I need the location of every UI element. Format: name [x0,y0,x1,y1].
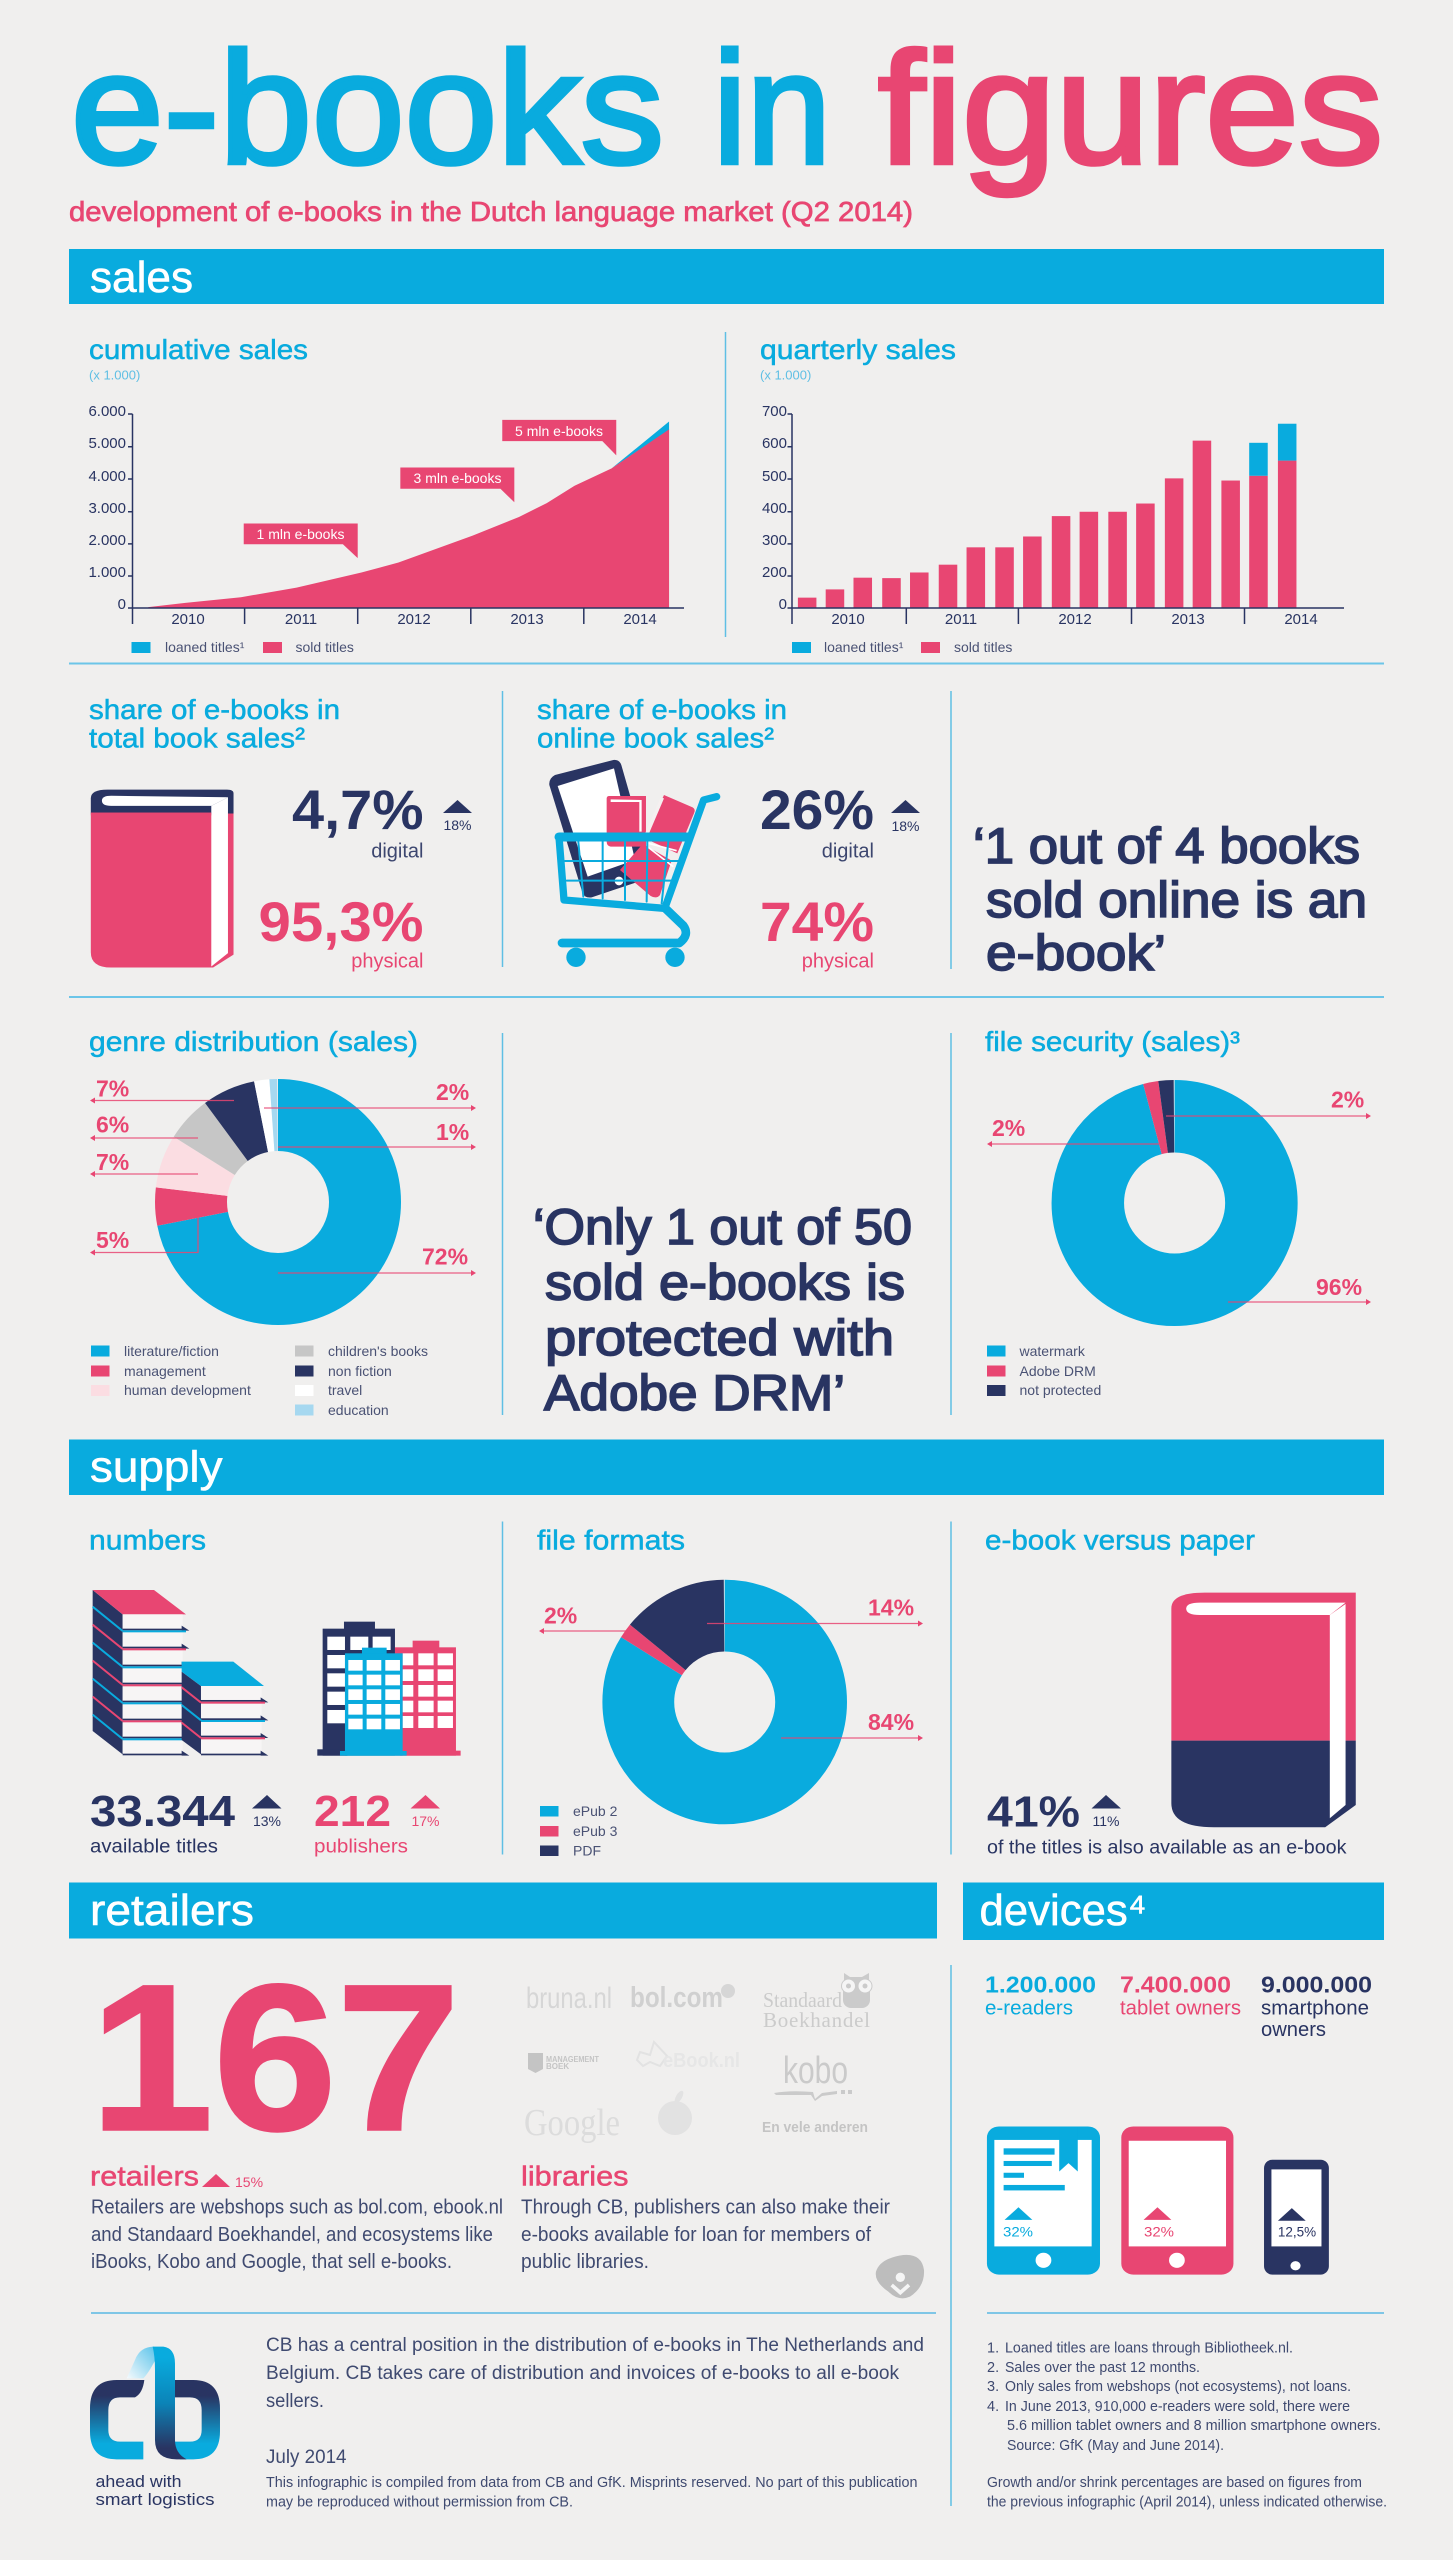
text block: retailers: 15% [235,2174,263,2190]
text block: CB description: July 2014 [266,2447,347,2468]
callout: 3 mln: 3 mln e-books [414,470,501,486]
stat: publishers: 212 [314,1787,391,1836]
logo: kobo [774,2050,852,2101]
icon: smartphone [1264,2160,1329,2275]
icon: smartphone: 12,5% [1278,2224,1316,2240]
quote: 1 out of 4 [973,818,1367,981]
icon: grey CB badge [876,2255,924,2298]
logo: Standaard Boekhandel: Boekhandel [763,2008,870,2032]
footnotes: In June 2013, 910,000 e-readers were sold, there were [1005,2399,1350,2415]
legend: sold titles [954,639,1012,655]
stat: available titles [90,1787,282,1858]
heading: quarterly sales: quarterly sales [760,334,956,365]
stat: 41% [987,1788,1347,1858]
leader labels: 72% [422,1244,468,1270]
logo: Managementboek: BOEK [546,2062,569,2071]
heading: file formats [537,1524,685,1556]
bar chart: 2011 [945,611,977,628]
area chart: 2010 [171,611,205,628]
text block: CB description: sellers. [266,2391,324,2412]
legend [540,1803,618,1858]
callout: 1 mln [244,523,358,558]
legend: education [328,1402,389,1418]
bar chart [762,403,1344,628]
leader labels: 2% [992,1115,1025,1141]
legend: sold titles [296,639,354,655]
legend: Adobe DRM [1020,1363,1096,1379]
bar chart: 600 [762,435,787,452]
logo: kobo: kobo [783,2050,848,2092]
stat: e-readers: e-readers [985,1998,1073,2020]
bar chart: 400 [762,500,787,517]
stat: digital: digital [822,840,874,862]
legend [132,639,354,655]
logo: Managementboek [528,2053,599,2073]
area chart: 2011 [285,611,317,628]
legend [987,1343,1101,1398]
stat: available titles: 33.344 [90,1787,236,1836]
quote: 1 out of 50: Adobe DRM’ [544,1365,845,1421]
growth arrow: 18% [891,818,920,834]
unit note: (x 1.000) [89,368,140,382]
icon: book [91,790,234,968]
icon: buildings [317,1622,461,1756]
logo: Managementboek: MANAGEMENT [546,2055,599,2064]
callout: 5 mln: 5 mln e-books [515,423,603,439]
panel: genre distribution [89,1026,476,1418]
donut chart [191,1115,365,1289]
area chart: 2013 [510,611,544,628]
bar chart: 700 [762,403,787,420]
stat: e-readers: 1.200.000 [985,1972,1096,1998]
section bar: retailers: retailers [90,1886,254,1935]
text block: CB description: Belgium. CB takes care of distribution and invoices of e-books to all e-book [266,2363,899,2384]
leader labels: 1% [436,1119,469,1145]
leader labels: 84% [868,1709,914,1735]
footnotes: Loaned titles are loans through Bibliotheek.nl. [1005,2340,1293,2356]
big number: 167 retailers: 167 [90,1942,460,2174]
panel: cumulative sales [88,334,684,655]
leader labels: 14% [868,1594,914,1620]
donut chart [1088,1116,1261,1290]
area chart: 5.000 [88,435,126,452]
stat: publishers [314,1787,440,1858]
quote: 1 out of 50: protected with [545,1310,894,1366]
icon: shopping cart [549,760,717,967]
stat: 41%: 41% [987,1788,1080,1836]
area chart: 2.000 [88,532,126,549]
text block: retailers [90,2160,503,2273]
footnotes: Only sales from webshops (not ecosystems), not loans. [1005,2379,1351,2395]
legend: loaned titles¹ [824,639,904,655]
section bar: supply [69,1440,1384,1495]
leader labels: 2% [1331,1086,1364,1112]
title: figures [878,19,1383,197]
heading [89,694,340,754]
stat: physical: physical [351,950,424,972]
callout: 5 mln [502,420,616,455]
legend: ePub 2 [573,1803,618,1819]
legend: non fiction [328,1363,392,1379]
area chart: 1.000 [88,564,126,581]
heading: cumulative sales: cumulative sales [89,334,308,365]
area chart: 2012 [397,611,431,628]
icon: tablet: 32% [1144,2224,1174,2240]
text block: CB description: CB has a central position in the distribution of e-books in The Netherlands and [266,2335,924,2356]
stat: tablet owners: 7.400.000 [1120,1972,1231,1998]
footnotes: Source: GfK (May and June 2014). [1007,2438,1224,2454]
heading [537,694,787,754]
leader labels: 2% [436,1079,469,1105]
bar chart: 2010 [831,611,865,628]
panel: numbers [89,1524,461,1858]
donut chart [638,1616,811,1788]
logo: Standaard Boekhandel: Standaard [763,1988,842,2012]
stat: tablet owners: tablet owners [1120,1998,1241,2020]
bar chart: 0 [779,596,787,613]
growth arrow [891,800,920,834]
footnotes: 1. [987,2340,999,2356]
tagline [96,2472,214,2509]
stat: digital: digital [371,840,424,862]
title: in [713,19,831,197]
growth arrow: 18% [443,817,472,833]
quote: 1 out of 50: sold e-books is [545,1254,905,1310]
stat: e-readers [985,1972,1096,2020]
stat: publishers: 17% [411,1813,440,1829]
footnotes: the previous infographic (April 2014), unless indicated otherwise. [987,2494,1387,2510]
text block: libraries: libraries [521,2160,628,2192]
legend: management [124,1363,206,1379]
heading: share of e-books in [89,694,340,725]
icon: tablet [1121,2126,1233,2275]
icon: e-reader: 32% [1003,2224,1033,2240]
footnotes: 3. [987,2379,999,2395]
retailer logos [524,1973,872,2144]
bar chart: 200 [762,564,787,581]
text block: libraries: Through CB, publishers can also make their [521,2196,890,2218]
stat: physical: 74% [760,890,874,953]
area chart: 2014 [623,611,657,628]
stat: digital: 26% [760,778,874,841]
legend [91,1343,428,1418]
quote: 1 out of 50 [533,1199,912,1421]
text block: libraries: public libraries. [521,2251,649,2273]
title: e-books [71,19,664,197]
stat: available titles: available titles [90,1836,218,1858]
subtitle: development of e-books in the Dutch language market (Q2 2014) [69,196,913,227]
legend: not protected [1020,1382,1101,1398]
footnotes: 2. [987,2360,999,2376]
logo: and many others: En vele anderen [762,2119,868,2136]
text block: libraries [521,2160,890,2273]
heading: online book sales² [537,722,774,754]
legend: loaned titles¹ [165,639,245,655]
legend: ePub 3 [573,1823,618,1839]
icon: e-reader [987,2126,1100,2275]
icon: big book [1171,1593,1356,1827]
quote: 1 out of 50: ‘Only 1 out of 50 [533,1199,912,1255]
section bar: sales: sales [90,253,193,302]
logo: bol.com: bol.com [630,1982,723,2014]
text block: libraries: e-books available for loan for members of [521,2224,871,2246]
logo: Standaard Boekhandel [763,1973,872,2032]
legend: PDF [573,1842,601,1858]
bar chart: 2012 [1058,611,1092,628]
callout: 3 mln [400,468,514,502]
quote: 1 out of 4: ‘1 out of 4 books [973,818,1360,874]
footnotes: Sales over the past 12 months. [1005,2360,1200,2376]
section bar: sales [69,249,1384,304]
footnotes [987,2340,1387,2510]
tagline: smart logistics [96,2490,214,2509]
area chart: 4.000 [88,468,126,485]
text block: CB description [266,2335,924,2510]
text block: retailers: and Standaard Boekhandel, and ecosystems like [91,2224,493,2246]
text block: CB description: This infographic is compiled from data from CB and GfK. Misprints reserved. No part of this publication [266,2475,918,2491]
text block: CB description: may be reproduced without permission from CB. [266,2494,573,2510]
stat: smartphone owners: 9.000.000 [1261,1972,1372,1998]
area chart [88,403,684,628]
heading: total book sales² [89,722,305,754]
stat: physical: physical [802,950,874,972]
leader labels [987,1086,1371,1305]
panel: share in total book sales [89,694,472,972]
footnotes: 5.6 million tablet owners and 8 million smartphone owners. [1007,2418,1381,2434]
heading: file security (sales)³ [985,1026,1240,1057]
bar chart: 300 [762,532,787,549]
panel: file security [985,1026,1371,1398]
quote: 1 out of 4: e-book’ [986,925,1166,981]
icon: book stacks [93,1590,268,1756]
text block: retailers: Retailers are webshops such as bol.com, ebook.nl [91,2196,503,2218]
title [71,19,1383,197]
logo: Google: Google [524,2102,620,2144]
area chart: 6.000 [88,403,126,420]
panel: file formats [537,1524,923,1858]
stat: 41%: 11% [1093,1813,1119,1829]
logo: bruna: bruna.nl [526,1982,612,2015]
heading: numbers [89,1524,206,1556]
unit note: (x 1.000) [760,368,811,382]
leader labels: 5% [96,1227,129,1253]
text block: retailers: iBooks, Kobo and Google, that sell e-books. [91,2251,452,2273]
logo: Apple [658,2089,692,2135]
logo: cb [90,2347,220,2509]
heading: share of e-books in [537,694,787,725]
stat: 41%: of the titles is also available as an e-book [987,1838,1347,1858]
callout: 1 mln: 1 mln e-books [257,526,344,542]
legend: children's books [328,1343,428,1359]
growth arrow [443,800,472,833]
leader labels: 7% [96,1149,129,1175]
logo: eBook.nl: eBook.nl [663,2050,740,2072]
panel: quarterly sales [760,334,1344,655]
stat: smartphone owners [1261,1972,1372,2041]
leader labels: 6% [96,1112,129,1138]
legend: watermark [1018,1343,1086,1359]
leader labels [539,1594,923,1741]
logo: eBook.nl [637,2042,740,2072]
section bar: devices: devices⁴ [980,1886,1146,1935]
footnotes: 4. [987,2399,999,2415]
section bar: supply: supply [90,1442,222,1492]
stat: smartphone owners: owners [1261,2019,1326,2041]
footnotes: Growth and/or shrink percentages are based on figures from [987,2475,1362,2491]
area chart: 0 [118,596,126,613]
heading: genre distribution (sales) [89,1026,418,1057]
section bar: retailers [69,1882,937,1938]
legend: human development [124,1382,251,1398]
leader labels: 2% [544,1602,577,1628]
leader labels: 96% [1316,1274,1362,1300]
legend: travel [328,1382,362,1398]
stat: smartphone owners: smartphone [1261,1998,1369,2020]
stat: publishers: publishers [314,1836,408,1858]
bar chart: 2014 [1284,611,1318,628]
area chart: 3.000 [88,500,126,517]
heading: e-book versus paper [985,1524,1255,1556]
legend: literature/fiction [124,1343,219,1359]
panel: share in online book sales [537,694,920,972]
quote: 1 out of 4: sold online is an [986,872,1367,928]
legend [792,639,1012,655]
leader labels: 7% [96,1076,129,1102]
leader labels [90,1076,476,1276]
stat: digital: 4,7% [292,778,424,841]
text block: retailers: retailers [90,2160,199,2192]
tagline: ahead with [96,2472,182,2491]
stat: available titles: 13% [253,1813,281,1829]
stat: tablet owners [1120,1972,1241,2020]
device stats [985,1972,1372,2041]
bar chart: 2013 [1171,611,1205,628]
stat: physical: 95,3% [258,890,424,953]
section bar: devices [963,1882,1384,1940]
bar chart: 500 [762,468,787,485]
panel: e-book versus paper [985,1524,1356,1858]
